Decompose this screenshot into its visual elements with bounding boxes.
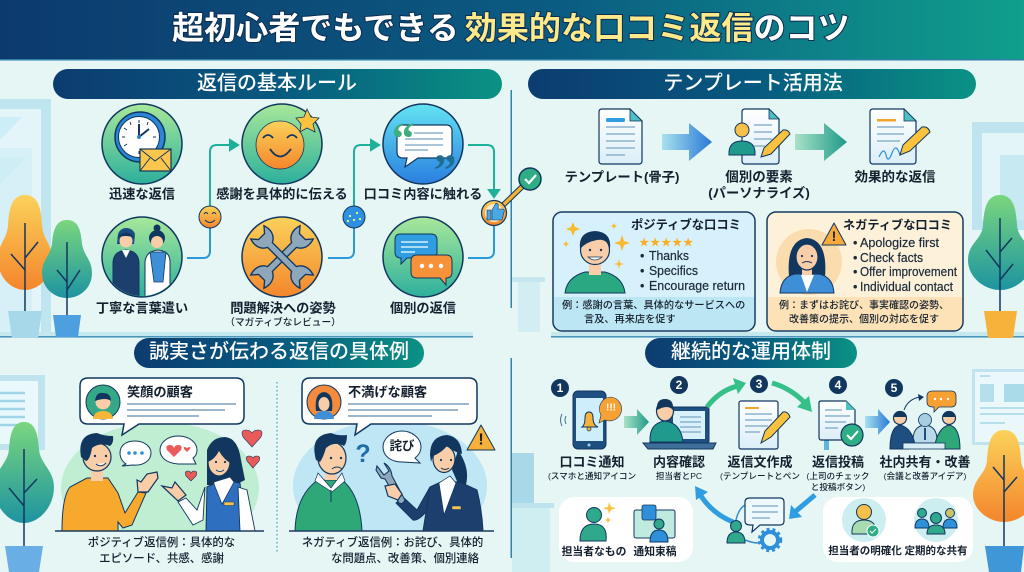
step 2 icon: person at laptop — [643, 376, 716, 449]
step labels: (スマホと通知アイコン — [548, 470, 636, 481]
speech bubble: dissatisfied customer: 不満げな顧客 — [348, 384, 427, 400]
warning icon — [822, 223, 846, 245]
arc arrow head — [733, 378, 746, 394]
rule labels: （マガティブなレビュー） — [225, 316, 341, 328]
icon: personalize doc — [729, 109, 790, 164]
bubble: apology: 詫び — [389, 438, 415, 453]
positive caption: エピソード、共感、感謝 — [99, 551, 225, 565]
positive example — [562, 298, 745, 326]
rule labels: 口コミ内容に触れる — [364, 186, 482, 202]
positive caption: ポジティブ返信例：具体的な — [88, 535, 235, 549]
step 3 icon: writing doc: 3 — [756, 377, 763, 391]
template step labels: 個別の要素 — [725, 168, 793, 184]
connector node: sparkle — [343, 206, 365, 228]
flow connectors — [187, 140, 526, 258]
icon: signed doc — [870, 109, 930, 164]
positive caption — [88, 535, 235, 565]
step labels: 返信投稿 — [812, 454, 864, 470]
card: negative reviews — [767, 212, 963, 331]
panel: テンプレート活用法 — [519, 69, 976, 331]
negative caption: な問題点、改善策、個別連絡 — [331, 551, 480, 565]
warning icon: ! — [832, 228, 836, 244]
negative caption — [302, 535, 483, 565]
heading: basic rules: 返信の基本ルール — [197, 72, 357, 94]
speech bubble: smiling customer: 笑顔の顧客 — [127, 384, 193, 400]
step 1 icon: phone: !!! — [606, 402, 616, 414]
step labels: (会議と改善アイデア) — [884, 470, 966, 481]
five stars: ★★★★★ — [638, 234, 693, 250]
card: positive reviews — [553, 212, 755, 331]
man in yellow — [62, 433, 158, 531]
negative bullets: • — [853, 236, 857, 250]
arrow: blue — [662, 123, 712, 161]
step 1 icon: phone: 1 — [557, 381, 564, 395]
connector node: thumbs up — [482, 200, 506, 226]
support labels: 通知束稿 — [633, 544, 677, 558]
ground line — [55, 530, 264, 532]
positive example: 例：感謝の言葉、具体的なサービスへの — [562, 298, 745, 312]
tree: orange top left — [0, 195, 52, 338]
step 2 icon: person at laptop: 2 — [676, 378, 683, 392]
support labels — [562, 544, 677, 558]
positive bullets: • — [640, 264, 644, 278]
icon: smile with star — [242, 104, 322, 184]
negative bullets: Offer improvement — [860, 265, 957, 279]
positive bullets: Encourage return — [649, 279, 745, 293]
step 3 icon: writing doc — [739, 375, 790, 449]
support labels: 担当者なもの — [562, 544, 626, 558]
heading: basic rules — [53, 69, 502, 99]
scene: negative — [289, 378, 495, 565]
rule labels: 感謝を具体的に伝える — [216, 186, 348, 202]
arc arrow: green — [707, 386, 738, 407]
speech bubble: dissatisfied customer — [302, 378, 477, 435]
positive bullets: Specifics — [649, 264, 698, 278]
responsible person icon — [842, 498, 886, 542]
rule labels — [96, 186, 482, 328]
arrow — [624, 409, 649, 435]
tree: green top right — [968, 195, 1024, 338]
hearts — [185, 430, 262, 481]
heading: ongoing operation — [645, 338, 857, 368]
scene: positive — [55, 378, 264, 565]
step labels: (上司のチェック — [806, 471, 870, 481]
rule labels: 丁寧な言葉遣い — [96, 300, 188, 316]
icon: quote bubble: “ — [392, 112, 414, 164]
panel: 誠実さが伝わる返信の具体例 — [55, 338, 495, 565]
positive example: 言及、再来店を促す — [584, 312, 676, 326]
tree: orange bottom right — [973, 430, 1024, 572]
positive bullets: • — [640, 279, 644, 293]
speech bubble: smiling customer — [80, 378, 244, 435]
positive bullets: Thanks — [649, 249, 689, 263]
step labels: 返信文作成 — [727, 454, 793, 470]
support labels: 担当者の明確化 — [828, 544, 902, 557]
heading: sincere examples: 誠実さが伝わる返信の具体例 — [149, 340, 409, 363]
icon: crossed wrenches — [242, 217, 322, 297]
warning icon — [467, 425, 495, 450]
positive bullets — [640, 249, 745, 293]
panel: 返信の基本ルール — [53, 69, 526, 328]
icon: quote bubble: ” — [434, 144, 456, 196]
bubble: dots — [120, 441, 151, 466]
title banner — [0, 0, 1024, 60]
step labels: 社内共有・改善 — [879, 454, 971, 470]
warning icon: ! — [478, 432, 484, 448]
arc arrow: green — [772, 383, 804, 402]
tree: green bottom left — [0, 422, 54, 572]
step 5 icon: team meeting — [885, 379, 960, 449]
dotted divider — [276, 382, 278, 552]
positive bullets: • — [640, 249, 644, 263]
step 4 icon: post doc: 4 — [835, 378, 842, 392]
woman in blazer — [376, 435, 483, 531]
step labels: (テンプレートとペン — [720, 471, 800, 481]
step 5 icon: team meeting: 5 — [891, 381, 898, 395]
check node — [519, 168, 541, 190]
question mark: ? — [355, 440, 371, 468]
rule labels: 問題解決への姿勢 — [230, 300, 336, 316]
icon: feedback loop — [727, 498, 784, 551]
step labels: 口コミ通知 — [559, 454, 625, 470]
panel: 継続的な運用体制 — [548, 338, 973, 562]
icon: clock with envelope — [102, 104, 182, 184]
negative bullets: • — [853, 251, 857, 265]
step labels: 内容確認 — [653, 454, 705, 470]
template step labels: テンプレート(骨子) — [565, 170, 679, 184]
icon: quote bubble — [383, 104, 463, 196]
heading: templates — [528, 69, 976, 99]
loop arrows — [695, 486, 815, 522]
wrench — [376, 463, 405, 504]
step labels — [548, 454, 971, 492]
negative caption: ネガティブ返信例：お詫び、具体的 — [302, 535, 483, 549]
positive customer — [565, 231, 625, 293]
bubble: hearts — [160, 436, 197, 464]
person icon — [580, 502, 616, 541]
negative bullets: • — [853, 280, 857, 294]
negative bullets: Individual contact — [860, 280, 953, 294]
icon: chat bubbles — [383, 217, 463, 297]
icon: bowing staff — [102, 217, 182, 298]
connector node: smile — [199, 206, 221, 228]
negative bullets: Check facts — [860, 251, 923, 265]
negative customer — [776, 229, 842, 295]
positive heading: ポジティブな口コミ — [631, 217, 741, 232]
tree: teal top left — [42, 220, 92, 337]
icon: template doc — [599, 109, 642, 164]
ground line — [289, 530, 494, 532]
woman in vest — [162, 437, 255, 531]
arrow: green — [795, 123, 847, 161]
rule labels: 個別の返信 — [390, 300, 456, 316]
heading: sincere examples — [134, 338, 424, 368]
negative example: 例：まずはお詫び、事実確認の姿勢、 — [779, 298, 949, 312]
team share icon — [914, 498, 958, 542]
step 4 icon: post doc — [819, 376, 863, 450]
negative bullets — [853, 236, 957, 294]
panel: left support card — [559, 497, 693, 562]
rule labels: 迅速な返信 — [109, 186, 175, 202]
screens icon — [634, 505, 675, 542]
heading: ongoing operation: 継続的な運用体制 — [671, 340, 831, 363]
negative example — [779, 298, 949, 326]
support labels: 定期的な共有 — [904, 544, 968, 557]
title: 超初心者でもできる効果的な口コミ返信のコツ — [172, 10, 850, 46]
negative example: 改善策の提示、個別の対応を促す — [789, 312, 939, 326]
step labels: と投稿ボタン) — [811, 481, 865, 492]
support labels — [828, 544, 968, 557]
negative bullets: • — [853, 265, 857, 279]
step 1 icon: phone — [551, 379, 622, 449]
template step labels — [565, 168, 936, 200]
step labels: 担当者とPC — [656, 470, 702, 481]
man in green — [295, 433, 362, 531]
sparkles — [563, 222, 630, 269]
arc arrow head — [797, 396, 812, 412]
negative bullets: Apologize first — [860, 236, 939, 250]
bubble: apology — [383, 431, 421, 463]
template step labels: (パーソナライズ) — [708, 184, 810, 200]
heading: templates: テンプレート活用法 — [663, 72, 843, 94]
arrow — [865, 409, 890, 435]
template step labels: 効果的な返信 — [854, 168, 936, 184]
panel: right support card — [823, 497, 973, 562]
negative heading: ネガティブな口コミ — [843, 217, 952, 232]
